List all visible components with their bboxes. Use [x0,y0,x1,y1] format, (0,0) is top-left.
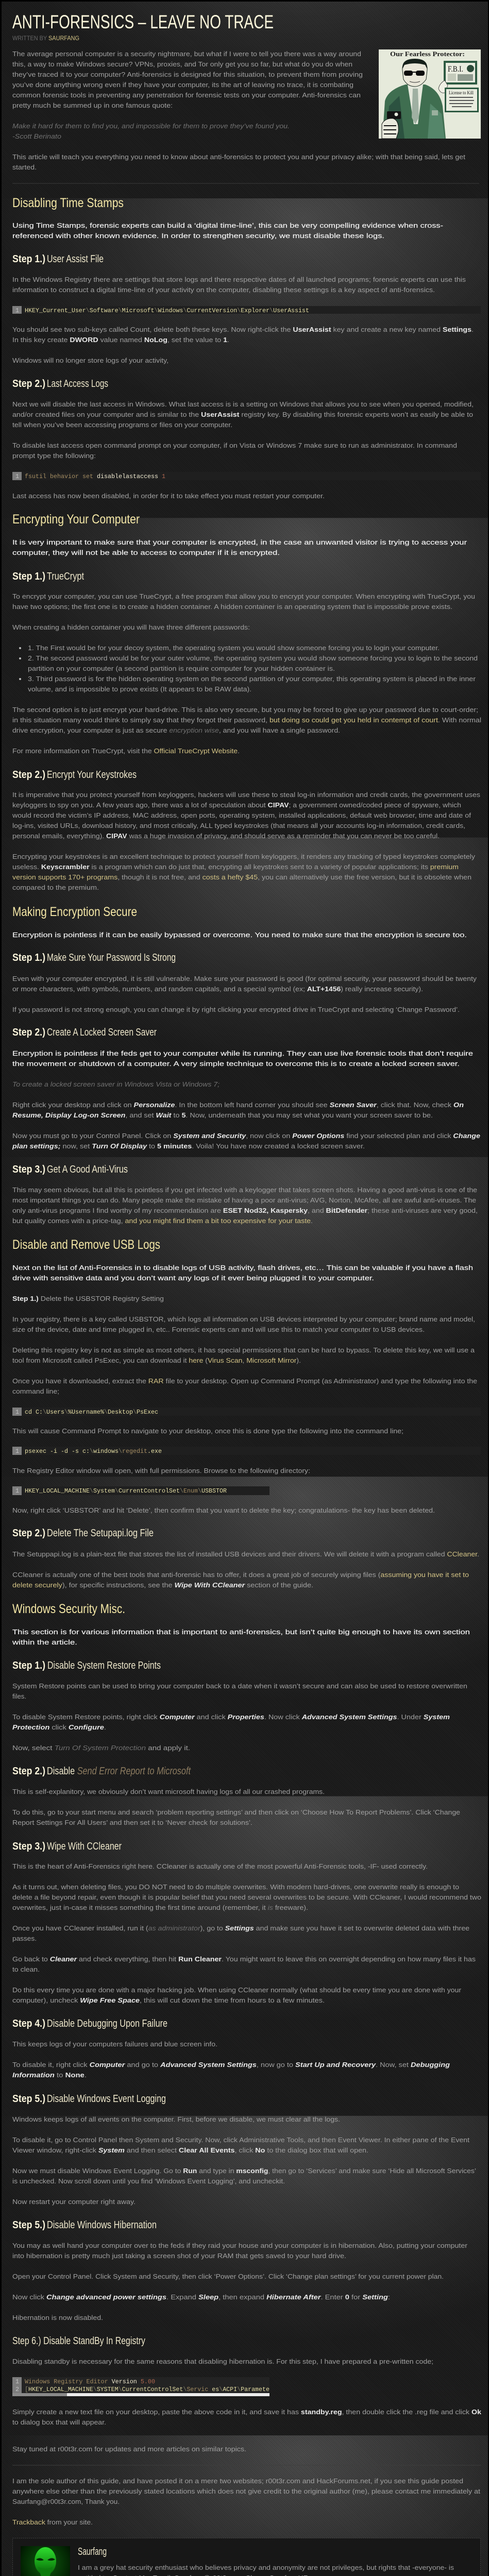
panel: encrypting your computer [12,512,481,891]
text block: To disable it, right click Computer and go to Advanced System Settings , now go to Start Up and Recovery . Now, set Debugging [12,2061,450,2069]
list: three passwords: 2. The second password would be for your outer volume, the operating system you would show someone forcing you to login to the second [28,654,478,662]
icon: FBI cartoon image: Our Fearless Protector: [390,50,465,58]
intro paragraph: you’ve done anything wrong even if they have your computer, its the art of leaving no trace, it is combating [12,81,353,89]
text block: Now restart your computer right away. [12,2198,136,2206]
step heading: ccleaner: Wipe With CCleaner [47,1841,122,1852]
text block: Windows will no longer store logs of your activity, [12,357,168,364]
code block: standby registry: 2 [15,2386,19,2393]
intro paragraph: The average personal computer is a security nightmare, but what if I were to tell you there was a way around [12,50,361,58]
section intro: Next on the list of Anti-Forensics in to disable logs of USB activity, flash drives, etc… This can be valuable if you have a flash [12,1264,473,1272]
step heading: system restore: Step 1.) [12,1660,45,1671]
text block: Disabling standby is necessary for the same reasons that disabling hibernation is. For this step, I have prepared a pre-written code; [12,2358,433,2365]
closing intro sentence: This article will teach you everything you need to know about anti-forensics to protect you and your privacy alike; with that being said, lets get [12,153,465,161]
section intro [12,1264,473,1282]
text block [12,1186,478,1225]
text block [12,1682,467,1752]
icon: FBI cartoon image [379,49,481,139]
text block: Now click Change advanced power settings . Expand Sleep , then expand Hibernate After . Enter 0 for Setting : [12,2293,390,2301]
text block: Simply create a new text file on your desktop, paste the above code in it, and save it has standby.reg , then double click the .reg file and click Ok [12,2408,482,2416]
step heading: last access logs [12,378,108,389]
text block: Now you must go to your Control Panel. Click on System and Security , now click on Power Options find your selected plan and click Change [12,1132,480,1140]
step heading: event logging [12,2093,166,2105]
text block [12,592,475,631]
author bio: I am a grey hat security enthusiast who believes privacy and anonymity are not privileges, but rights that -everyone- is [78,2564,454,2571]
section intro: This section is for various information that is important to anti-forensics, but isn’t quite big enough to have its own section [12,1628,470,1636]
bold statement: Encryption is pointless if the feds get to your computer while its running. They can use live forensic tools that don’t require [12,1049,473,1057]
text block: Last access has now been disabled, in order for it to take effect you must restart your computer. [12,492,325,500]
section intro [12,222,443,240]
text block: Information to None . [12,2071,87,2079]
text block: Once you have it downloaded, extract the RAR file to your desktop. Open up Command Prompt (as Administrator) and type the following into the [12,1377,477,1385]
step heading: anti-virus: Step 3.) [12,1164,45,1175]
text block: Resume, Display Log-on Screen , and set Wait to 5. Now, underneath that you may set what you want your screen saver to be. [12,1111,433,1119]
text block: System Restore points can be used to bring your computer back to a date when it wasn’t secure and can also be used to restore overwritten [12,1682,467,1690]
step heading: setupapi log: Delete The Setupapi.log File [47,1528,154,1539]
text block: Report Settings For All Users’ and then set it to ‘Never check for solutions’. [12,1819,252,1826]
text block: When creating a hidden container you will have three different passwords: [12,623,250,631]
text block: to clean. [12,1965,40,1973]
text block: The second option is to just encrypt your hard-drive. This is also very secure, but you may be forced to give up your password due to court-order; [12,706,478,714]
step heading: event logging: Step 5.) [12,2093,45,2105]
bold statement: the movement or shutdown of a computer. A very simple technique to overcome this is to create a locked screen saver. [12,1060,460,1067]
list: three passwords: 1. The First would be for your decoy system, the operating system you would show someone forcing you to login your computer. [28,644,440,652]
text block: version supports 170+ programs , though it is not free, and costs a hefty $45 , you can alternatively use the free version, but it is obsolete when [12,873,471,881]
step label: USBSTOR: Step 1.) Delete the USBSTOR Registry Setting [12,1295,164,1302]
code block: fsutil: 1 [15,473,19,480]
text block [12,1550,479,1589]
text block: overwrites, just in-case it misses something the first time around (remember, it is freeware). [12,1904,308,1911]
icon: FBI cartoon image: License to Kill [449,90,474,95]
text block: For more information on TrueCrypt, visit the Official TrueCrypt Website . [12,747,240,755]
step heading: anti-virus [12,1164,128,1175]
text block: Hibernation is now disabled. [12,2314,103,2321]
text block [12,1080,480,1150]
code block: standby registry: [HKEY_LOCAL_MACHINE\SYSTEM\CurrentControlSet\Servic es\ACPI\Paramete [25,2386,269,2393]
step heading: locked screen saver: Step 2.) [12,1027,45,1038]
text block: Next we will disable the last access in Windows. What last access is is a setting on Windows that allows you to see when you opened, modified, [12,400,474,408]
panel: windows security misc [12,1602,482,2426]
section intro: Using Time Stamps, forensic experts can build a ‘digital time-line’, this can be very compelling evidence when cross- [12,222,443,229]
section intro [12,1628,470,1646]
list: three passwords: partition on your computer (a second partition is require computer for your hidden container is. [28,665,335,672]
text block: To disable last access open command prompt on your computer, if on Vista or Windows 7 make sure to run as administrator. In command [12,442,457,449]
list: three passwords [19,644,478,693]
text block: This keeps logs of your computers failures and blue screen info. [12,2040,217,2048]
title: ANTI-FORENSICS – LEAVE NO TRACE [12,11,274,32]
text block: Right click your desktop and click on Personalize . In the bottom left hand corner you should see Screen Saver , click that. Now, check On [12,1101,464,1109]
text block [12,1788,460,1826]
step heading: system restore [12,1660,161,1671]
stay tuned note: Stay tuned at r00t3r.com for updates and more articles on similar topics. [12,2445,246,2453]
text block: would record the victim’s IP address, MAC address, open ports, operating system, installed applications, default web browser, time and date of [12,811,471,819]
bold statement [12,1049,473,1067]
closing intro sentence [12,153,465,171]
step heading: debugging [12,2018,167,2029]
list: three passwords: 3. Third password is for the hidden operating system on the second partition of your computer, this operating system is placed in the inner [28,675,476,683]
text block: Do this every time you are done with a major hacking job. When using CCleaner normally (what should be every time you are done with your [12,1986,462,1994]
code block: registry key: 1 [15,307,19,314]
text block [12,1862,481,2004]
section intro [12,538,467,556]
text block: Now, right click ‘USBSTOR’ and hit ‘Delete’, then confirm that you want to delete the key; congratulations- the key has been deleted. [12,1506,435,1514]
text block: As it turns out, when deleting files, you DO NOT need to do multiple overwrites. With modern hard-drives, one overwrite really is enough to [12,1883,459,1891]
text block: Go back to Cleaner and check everything, then hit Run Cleaner . You might want to leave this on overnight depending on how many files it has [12,1955,476,1963]
step heading: ccleaner: Step 3.) [12,1841,45,1852]
section intro: referenced with other known evidence. In order to strengthen security, we must disable these logs. [12,232,384,240]
closing intro sentence: started. [12,163,37,171]
step heading: strong password: Step 1.) [12,952,45,963]
text block [12,2115,476,2206]
text block: information to construct a digital time-line of your activity on the computer, disabling these settings is a key aspect of anti-forensics. [12,286,435,294]
text block [12,2242,468,2321]
text block: If you password is not strong enough, you can change it by right clicking your encrypted drive in TrueCrypt and selecting ‘Change Password’. [12,1006,460,1013]
code block: registry key [12,306,481,314]
text block: personal emails, everything). CIPAV was a huge invasion of privacy, and should serve as a reminder that you can never be too careful. [12,832,440,840]
text block: To disable it, go to Control Panel then System and Security. Now, click Administrative Tools, and then Event Viewer. In either pane of the Event [12,2136,469,2144]
step heading: encrypt keystrokes: Step 2.) [12,769,45,781]
quote [12,122,290,140]
step heading: user assist: User Assist File [47,253,104,265]
text block: to dialog box that will appear. [12,2418,106,2426]
code block: psexec command: 1 [15,1448,19,1455]
heading: Making Encryption Secure [12,905,137,919]
text block: You should see two sub-keys called Count, delete both these keys. Now right-click the UserAssist key and create a new key named Settings . [12,326,474,333]
intro paragraph: pretty much be summed up in one famous quote: [12,101,173,109]
text block [12,1315,477,1395]
text block: In your registry, there is a key called USBSTOR, which logs all information on USB devices interpreted by your computer; brand name and model, [12,1315,475,1323]
text block: delete a file beyond repair, even though it is popular belief that you need several overwrites to be secure. With CCleaner, I would recommend two [12,1893,481,1901]
authorship notice [12,2477,480,2505]
step heading: event logging: Disable Windows Event Logging [47,2093,166,2105]
icon: FBI cartoon image: F.B.I. [448,65,463,74]
heading: Windows Security Misc. [12,1602,125,1616]
text block: Viewer window, right-click System and then select Clear All Events , click No to the dialog box that will open. [12,2146,368,2154]
text block: In the Windows Registry there are settings that store logs and there respective dates of all launched programs; forensic experts can use this [12,276,466,283]
text block: tool from Microsoft called PsExec, you can download it here (Virus Scan , Microsoft Mirror ). [12,1357,301,1364]
authorship notice: Saurfang@r00t3r.com, Thank you. [12,2498,120,2505]
text block: CCleaner is actually one of the best tools that anti-forensic has to offer, it does a great job of securely wiping files ( assuming you have it set to [12,1571,469,1579]
code block: cd command: 1 [15,1409,19,1416]
text block: prompt type the following: [12,452,96,460]
code block: psexec command: psexec -i -d -s c:\windows\regedit.exe [25,1448,162,1455]
heading: Disable and Remove USB Logs [12,1238,160,1252]
step heading: hibernation [12,2219,157,2231]
step heading: encrypt keystrokes: Encrypt Your Keystrokes [47,769,137,781]
author bio [78,2564,454,2576]
text block: Open your Control Panel. Click System and Security, then click ‘Power Options’. Click ‘Change plan settings’ for you current power plan. [12,2273,444,2280]
text block: To disable System Restore points, right click Computer and click Properties . Now click Advanced System Settings . Under System [12,1713,450,1721]
quote: -Scott Berinato [12,132,61,140]
step heading: hibernation: Step 5.) [12,2219,45,2231]
text block: size of the device, date and time plugged in, etc.. Forensic experts can and will use this to match your computer to USB devices. [12,1326,425,1333]
icon: author avatar [21,2546,70,2576]
step heading: error report: Disable Send Error Report to Microsoft [47,1766,191,1777]
panel: making encryption secure [12,905,480,1225]
text block: To create a locked screen saver in Windows Vista or Windows 7; [12,1080,220,1088]
step heading: setupapi log: Step 2.) [12,1528,45,1539]
code block: standby registry: Windows Registry Editor Version 5.00 [25,2378,155,2385]
text block: In this key create DWORD value named NoLog , set the value to 1. [12,336,229,344]
intro paragraph [12,50,363,109]
text block [12,276,466,294]
panel: disabling time stamps [12,196,481,500]
intro paragraph: they’ve traced it to your computer? Anti-forensics is designed for this situation, to prevent them from proving [12,71,363,78]
trackback link: Trackback from your site. [12,2518,93,2526]
code block: fsutil [12,472,481,480]
step heading: standby: Step 6.) Disable StandBy In Registry [12,2335,145,2347]
code block: USBSTOR key: HKEY_LOCAL_MACHINE\System\CurrentControlSet\Enum\USBSTOR [25,1487,227,1495]
section intro: drive with sensitive data and you don’t want any logs of it ever being plugged it to your computer. [12,1274,374,1282]
text block: command line; [12,1387,59,1395]
quote: Make it hard for them to find you, and impossible for them to prove they’ve found you. [12,122,290,130]
text block: The Setuppapi.log is a plain-text file that stores the list of installed USB devices and their drivers. We will delete it with a program called CCleaner . [12,1550,479,1558]
text block: compared to the premium. [12,884,99,891]
text block: The Registry Editor window will open, with full permissions. Browse to the following directory: [12,1467,310,1475]
text block: Deleting this registry key is not as simple as most others, it has special permissions that can be hard to bypass. To delete this key, we will use a [12,1346,475,1354]
intro paragraph: this, a way to make Windows secure? VPNs, proxies, and Tor only get you so far, but what do you do when [12,60,352,68]
panel: article footer [12,2445,481,2576]
text block: passes. [12,1935,37,1942]
panel: disable and remove USB logs [12,1238,481,1589]
text block: Once you have CCleaner installed, run it ( as administrator ), go to Settings and make sure you have it set to overwrite deleted data with three [12,1924,469,1932]
step heading: ccleaner [12,1841,122,1852]
step heading: setupapi log [12,1528,154,1539]
text block: This is the heart of Anti-Forensics right here. CCleaner is actually one of the most powerful Anti-Forensic tools, -IF- used correctly. [12,1862,428,1870]
text block [12,400,474,460]
code block: registry key: HKEY_Current_User\Software\Microsoft\Windows\CurrentVersion\Explorer\UserAssist [25,307,309,314]
text block: This may seem obvious, but all this is pointless if you get infected with a keylogger that takes screen shots. Having a good anti-virus is one of the [12,1186,477,1194]
text block: Protection click Configure . [12,1723,106,1731]
step heading: strong password: Make Sure Your Password Is Strong [47,952,176,963]
text block: plan settings; now, set Turn Of Display to 5 minutes . Voila! You have now created a locked screen saver. [12,1142,365,1150]
text block: You may as well hand your computer over to the feds if they raid your house and your computer is in hibernation. Also, putting your computer [12,2242,468,2249]
text block: drive encryption, your computer is just as secure encryption wise , and you will have a single password. [12,726,340,734]
text block: most important things you can do. Many people make the mistake of having a poor anti-virus; AVG, Norton, McAfee, all are awful anti-viruses. The [12,1196,476,1204]
text block: useless. Keyscrambler is a program which can do just that, encrypting all keystrokes sent to a variety of popular applications; its premium [12,863,459,871]
step heading: locked screen saver [12,1027,157,1038]
text block: To encrypt your computer, you can use TrueCrypt, a free program that allow you to encrypt your computer. When encrypting with TrueCrypt, you [12,592,475,600]
text block [12,975,477,1013]
code block: standby registry: 1 [15,2378,19,2385]
section intro: It is very important to make sure that your computer is encrypted, in the case an unwanted visitor is trying to access your [12,538,467,546]
step heading: truecrypt: Step 1.) [12,571,45,582]
code block: USBSTOR key: 1 [15,1487,19,1495]
code block: fsutil: fsutil behavior set disablelastaccess 1 [25,473,165,480]
section intro: within the article. [12,1638,77,1646]
text block: or more characters, with symbols, numbers, and random capitals, and a special symbol (ex; ALT+1456 ) really increase security). [12,985,423,993]
step heading: last access logs: Last Access Logs [47,378,108,389]
text block [12,706,481,755]
code block: cd command [12,1408,481,1416]
step heading: error report: Step 2.) [12,1766,45,1777]
text block: into hibernation is pretty much just taking a screen shot of your RAM that gets saved to your hard drive. [12,2252,346,2260]
step heading: debugging: Disable Debugging Upon Failure [47,2018,167,2029]
text block: Now, select Turn Of System Protection and apply it. [12,1744,190,1752]
text block: This will cause Command Prompt to navigate to your desktop, once this is done type the following into the command line; [12,1427,403,1435]
text block [12,2040,450,2079]
step heading: truecrypt [12,571,84,582]
code block: cd command: cd C:\Users\%Username%\Desktop\PsExec [25,1409,158,1416]
heading: Disabling Time Stamps [12,196,124,210]
text block: delete securely ), for specific instructions, see the Wipe With CCleaner section of the guide. [12,1581,313,1589]
text block: This is self-explanitory, we obviously don’t want microsoft having logs of all our crashed programs. [12,1788,325,1795]
authorship notice: anywhere else other than the previously stated locations which does not give credit to the original author (me), please contact me immediately at [12,2487,480,2495]
author name: Saurfang [78,2546,107,2557]
intro paragraph: common forensic tools in preventing any penetration for forensic tests on your computer. Anti-forensics can [12,91,361,99]
text block: computer), uncheck Wipe Free Space , this will cut down the time from hours to a few minutes. [12,1996,325,2004]
step heading: locked screen saver: Create A Locked Screen Saver [47,1027,157,1038]
text block: Now we must disable Windows Event Logging. Go to Run and type in msconfig , then go to ‘Services’ and make sure ‘Hide all Microsoft Services’ [12,2167,476,2175]
heading: Encrypting Your Computer [12,512,140,527]
step heading: anti-virus: Get A Good Anti-Virus [47,1164,128,1175]
text block: only anti-virus programs I find worthy of my recommendation are ESET Nod32, Kaspersky , and BitDefender ; these anti-viruses are very good, [12,1207,478,1214]
code block: standby registry [12,2377,269,2396]
step heading: hibernation: Disable Windows Hibernation [47,2219,157,2231]
text block: is unchecked. Now scroll down until you find ‘Windows Event Logging’, and uncheckit. [12,2177,285,2185]
text block: It is imperative that you protect yourself from keyloggers, hackers will use these to steal log-in information and credit cards, the government uses [12,791,481,799]
step heading: user assist: Step 1.) [12,253,45,265]
step heading: debugging: Step 4.) [12,2018,45,2029]
text block: have two options; the first one is to create a hidden container. A hidden container is an operating system that is impossible prove exists. [12,603,452,611]
text block: but quality comes with a price-tag, and you might find them a bit too expensive for your taste . [12,1217,313,1225]
step heading: last access logs: Step 2.) [12,378,45,389]
step heading: system restore: Disable System Restore Points [47,1660,161,1671]
step heading: encrypt keystrokes [12,769,137,781]
text block: files. [12,1692,26,1700]
text block: tell when you’ve been accessing programs or files on your computer. [12,421,232,429]
text block: log-ins, visited URLs, download history, and most critically, ALL typed keystrokes (that means all your accounts log-in information, credit cards, [12,822,465,829]
code block: psexec command [12,1447,481,1455]
section intro: Encryption is pointless if it can be easily bypassed or overcome. You need to make sure that the encryption is secure too. [12,931,467,939]
text block: in this situation many would think to simply say that they forgot their password, but doing so could get you held in contempt of court . With normal [12,716,481,724]
panel: article intro [12,11,481,183]
text block: Encrypting your keystrokes is an excellent technique to protect yourself from keyloggers, it renders any tracking of typed keystrokes completely [12,853,476,860]
authorship notice: I am the sole author of this guide, and have posted it on a mere two websites; r00t3r.com and HackForums.net, if you see this guide posted [12,2477,463,2485]
step heading: strong password [12,952,176,963]
section intro: computer, they will not be able to access to computer if it is encrypted. [12,549,280,556]
text block: Even with your computer encrypted, it is still vulnerable. Make sure your password is good (for optimal security, your password should be twenty [12,975,477,982]
text block: keyloggers to spy on you. A few years ago, there was a lot of speculation about CIPAV; a government owned/coded piece of spyware, which [12,801,461,809]
code block: USBSTOR key [12,1486,269,1495]
step heading: user assist [12,253,104,265]
text block [12,791,481,891]
text block: Windows keeps logs of all events on the computer. First, before we disable, we must clear all the logs. [12,2115,340,2123]
panel: author box [12,2538,480,2576]
byline: WRITTEN BY SAURFANG [12,35,79,42]
step heading: truecrypt: TrueCrypt [47,571,84,582]
text block: To do this, go to your start menu and search ‘problem reporting settings’ and then click on ‘Choose How To Report Problems’. Click ‘Change [12,1808,460,1816]
text block: and/or created files on your computer and is similar to the UserAssist registry key. By disabling this forensic experts won’t as easily be able to [12,411,473,418]
text block [12,2408,482,2426]
text block [12,326,474,364]
list: three passwords: volume, and is impossible to prove exists (It appears to be RAW data). [28,685,251,693]
